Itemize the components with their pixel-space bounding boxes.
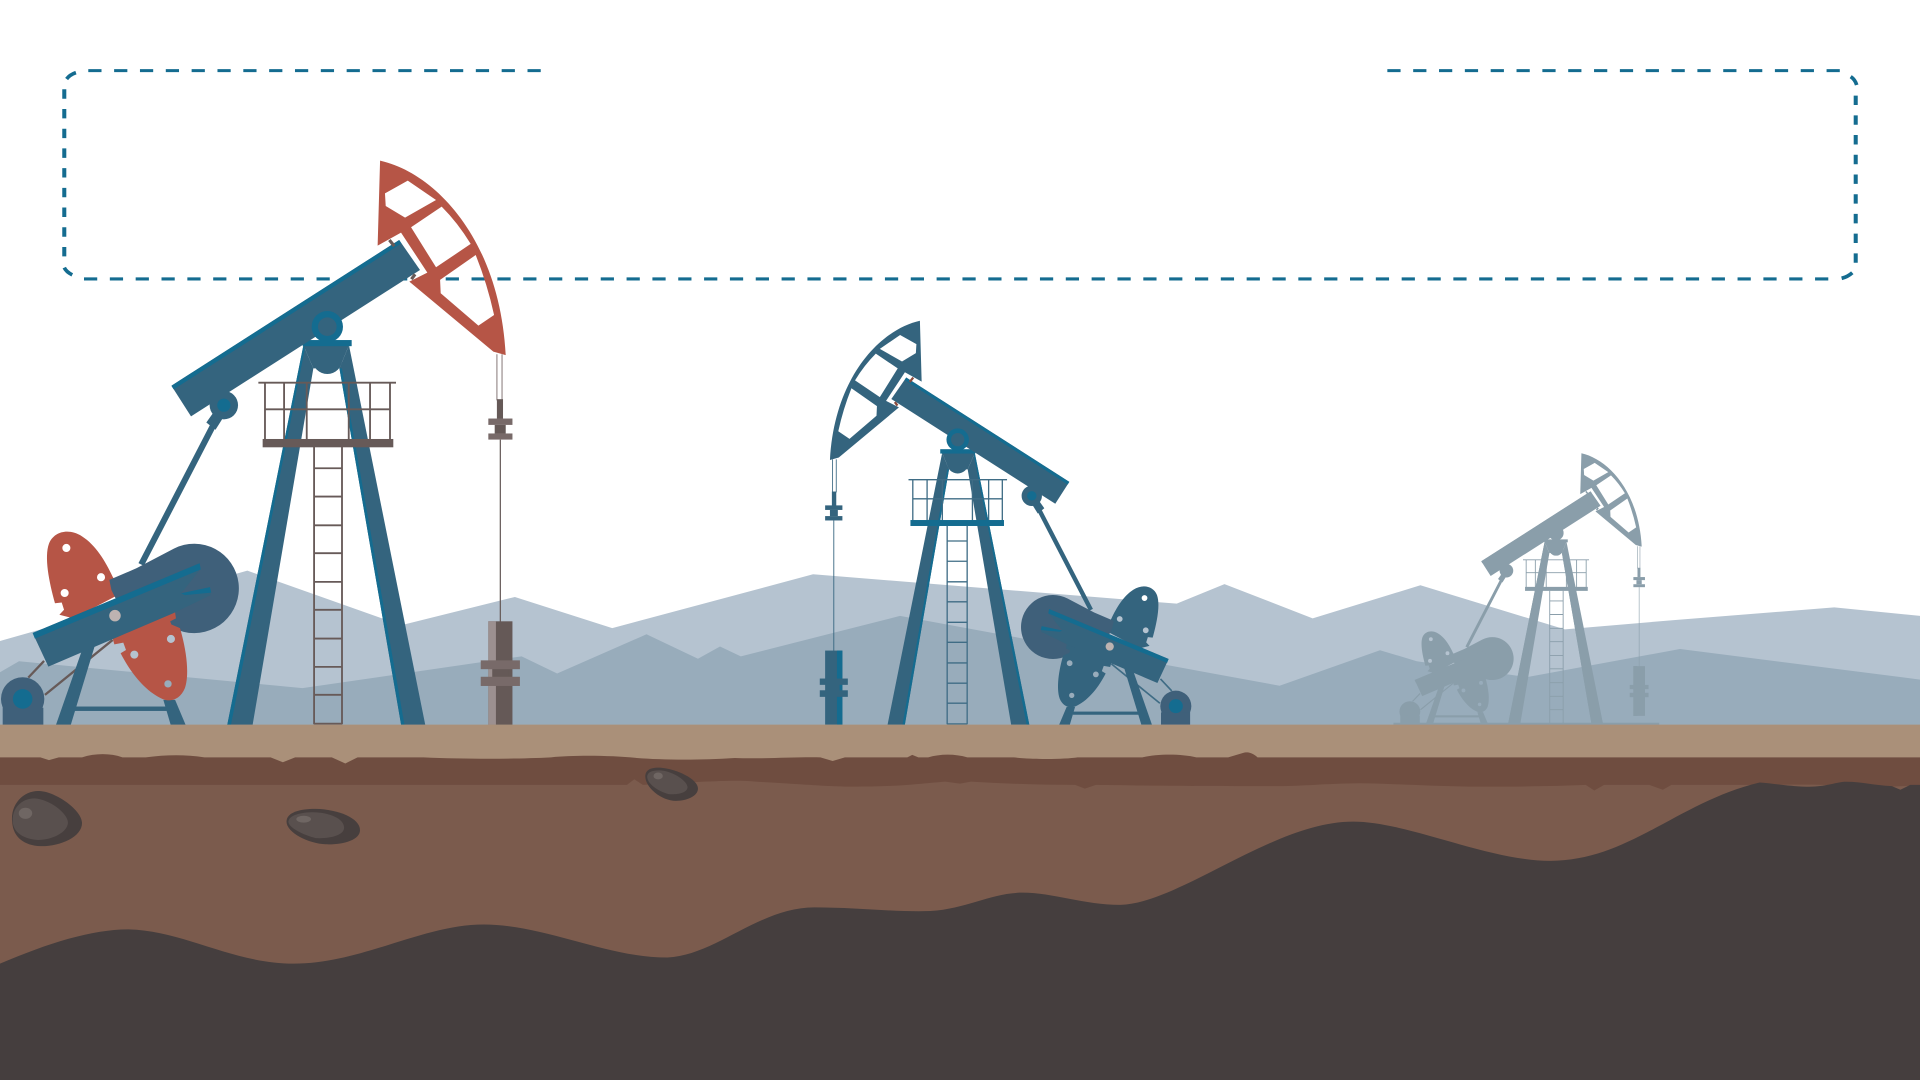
motor bbox=[1, 677, 44, 725]
railing bbox=[258, 383, 396, 441]
sandy topsoil layer bbox=[0, 725, 1920, 763]
back mountain range bbox=[0, 571, 1920, 729]
ladder bbox=[314, 447, 342, 724]
A-frame legs bbox=[227, 340, 425, 725]
pump jack: large red foreground bbox=[1, 161, 520, 725]
upper counterweight lobe bbox=[47, 532, 122, 618]
rock: centre bbox=[645, 768, 698, 801]
subsoil layer bbox=[0, 779, 1920, 1080]
horse head connectors bbox=[389, 240, 415, 279]
horse head bbox=[378, 161, 506, 355]
dark soil band bbox=[0, 749, 1920, 791]
distant ground line bbox=[1393, 723, 1659, 725]
walking beam bbox=[171, 240, 420, 416]
pump jack: medium blue mirrored bbox=[820, 321, 1191, 725]
polished rod and hanger bbox=[488, 354, 512, 624]
underground oil reservoir bbox=[0, 782, 1920, 1080]
front mountain range bbox=[0, 616, 1920, 729]
pitman joint bbox=[206, 391, 238, 430]
pitman arm bbox=[141, 425, 213, 564]
rock: centre-left bbox=[287, 809, 360, 844]
rock: left bbox=[12, 791, 82, 846]
lower counterweight lobe bbox=[113, 612, 187, 700]
pump jack: small grey distant bbox=[1399, 453, 1649, 724]
crank base frame bbox=[56, 645, 186, 725]
dashed title frame bbox=[64, 71, 1857, 279]
motor lines bbox=[28, 640, 113, 695]
crank lever bbox=[33, 563, 211, 667]
wellhead: lower block bbox=[481, 621, 520, 725]
platform bbox=[263, 439, 393, 447]
crank body bbox=[109, 544, 239, 633]
